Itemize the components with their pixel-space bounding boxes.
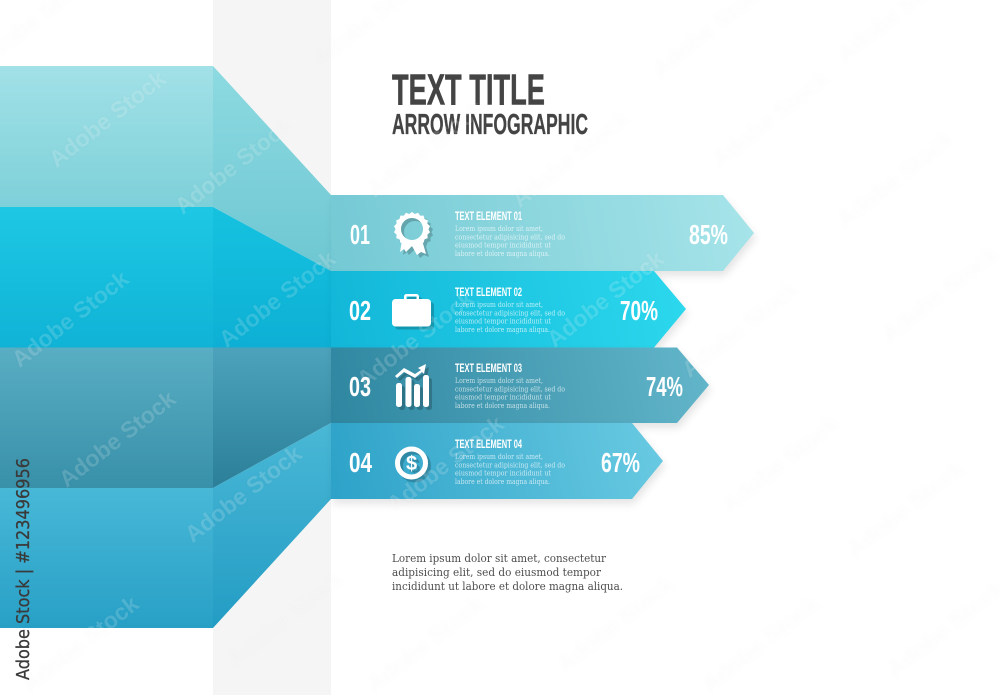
arrow 4 body: eiusmod tempor incididunt ut	[455, 468, 551, 478]
arrow 3 body: consectetur adipisicing elit, sed do	[455, 384, 565, 394]
subtitle: ARROW INFOGRAPHIC	[392, 109, 588, 141]
arrow 4 body	[455, 452, 565, 486]
band 4	[0, 423, 331, 628]
arrow 1 number: 01	[350, 219, 370, 250]
icon: dollar coin: $	[406, 453, 417, 475]
watermarks: Adobe Stock	[842, 455, 969, 562]
arrow 2 shape	[331, 271, 686, 348]
icon: growth chart	[395, 364, 429, 407]
arrow 3 number: 03	[349, 371, 371, 402]
watermarks: Adobe Stock	[54, 385, 181, 492]
arrow 3	[331, 348, 709, 423]
watermarks: Adobe Stock	[44, 65, 171, 172]
watermarks: Adobe Stock	[697, 590, 824, 695]
arrow 2 body: Lorem ipsum dolor sit amet,	[455, 300, 543, 309]
background strip	[213, 0, 331, 695]
footer text block: adipisicing elit, sed do eiusmod tempor	[392, 566, 602, 579]
arrow 2 body: labore et dolore magna aliqua.	[455, 325, 550, 334]
watermarks: Adobe Stock	[222, 565, 349, 672]
watermarks: Adobe Stock	[352, 285, 479, 392]
watermarks: Adobe Stock	[17, 590, 144, 695]
arrow 4 heading: TEXT ELEMENT 04	[455, 439, 522, 451]
arrow 1 shape	[331, 195, 754, 271]
icon: rosette badge	[394, 212, 430, 255]
watermarks: Adobe Stock	[7, 265, 134, 372]
footer text block	[392, 552, 623, 593]
arrow 3 heading: TEXT ELEMENT 03	[455, 363, 522, 375]
icon: briefcase	[392, 294, 431, 326]
watermarks: Adobe Stock	[180, 440, 307, 547]
arrow 3 body: eiusmod tempor incididunt ut	[455, 392, 551, 402]
arrow 2 heading: TEXT ELEMENT 02	[455, 287, 522, 299]
arrow 4 body: consectetur adipisicing elit, sed do	[455, 460, 565, 470]
band 2	[0, 207, 331, 348]
arrow 4	[331, 423, 663, 499]
arrow 1 percent: 85%	[689, 219, 728, 250]
arrow 1 body: Lorem ipsum dolor sit amet,	[455, 224, 543, 233]
footer text block: Lorem ipsum dolor sit amet, consectetur	[392, 552, 607, 565]
arrow 4 shape	[331, 423, 663, 499]
watermarks: Adobe Stock	[507, 105, 634, 212]
arrow 4 body: Lorem ipsum dolor sit amet,	[455, 452, 543, 461]
arrow 3 shape	[331, 348, 709, 423]
watermarks: Adobe Stock	[362, 95, 489, 202]
band 3	[0, 348, 331, 488]
watermarks: Adobe Stock	[214, 245, 341, 352]
watermarks: Adobe Stock	[552, 570, 679, 677]
watermarks: Adobe Stock	[677, 275, 804, 382]
arrow 1 body	[455, 224, 565, 258]
arrow 3 body: labore et dolore magna aliqua.	[455, 401, 550, 410]
arrow 3 percent: 74%	[646, 371, 683, 402]
arrow 1 body: labore et dolore magna aliqua.	[455, 249, 550, 258]
arrow 3 body: Lorem ipsum dolor sit amet,	[455, 376, 543, 385]
arrow 2 body: eiusmod tempor incididunt ut	[455, 316, 551, 326]
arrow 2 percent: 70%	[620, 295, 658, 326]
watermarks: Adobe Stock	[832, 125, 959, 232]
icon: dollar coin	[398, 449, 426, 477]
title: TEXT TITLE	[392, 66, 545, 114]
arrow 2	[331, 271, 686, 348]
watermarks: Adobe Stock	[542, 245, 669, 352]
arrow 2 body: consectetur adipisicing elit, sed do	[455, 308, 565, 318]
arrow 4 percent: 67%	[601, 447, 640, 478]
arrow 1	[331, 195, 754, 271]
watermarks: Adobe Stock	[362, 590, 489, 695]
arrow 1 body: eiusmod tempor incididunt ut	[455, 240, 551, 250]
watermarks: Adobe Stock	[877, 240, 1000, 347]
watermarks: Adobe Stock	[717, 410, 844, 517]
arrow 1 heading: TEXT ELEMENT 01	[455, 211, 522, 223]
arrow 3 body	[455, 376, 565, 410]
watermarks: Adobe Stock	[170, 112, 297, 219]
arrow 4 body: labore et dolore magna aliqua.	[455, 477, 550, 486]
band 1	[0, 66, 331, 271]
arrow 4 number: 04	[349, 447, 372, 478]
footer text block: incididunt ut labore et dolore magna aliqua.	[392, 580, 623, 593]
arrow 2 number: 02	[349, 295, 371, 326]
stock id label: Adobe Stock | #123496956	[13, 458, 34, 680]
arrow 1 body: consectetur adipisicing elit, sed do	[455, 232, 565, 242]
watermarks: Adobe Stock	[382, 410, 509, 517]
left ribbon bands	[0, 66, 331, 628]
arrow 2 body	[455, 300, 565, 334]
watermarks: Adobe Stock	[707, 65, 834, 172]
